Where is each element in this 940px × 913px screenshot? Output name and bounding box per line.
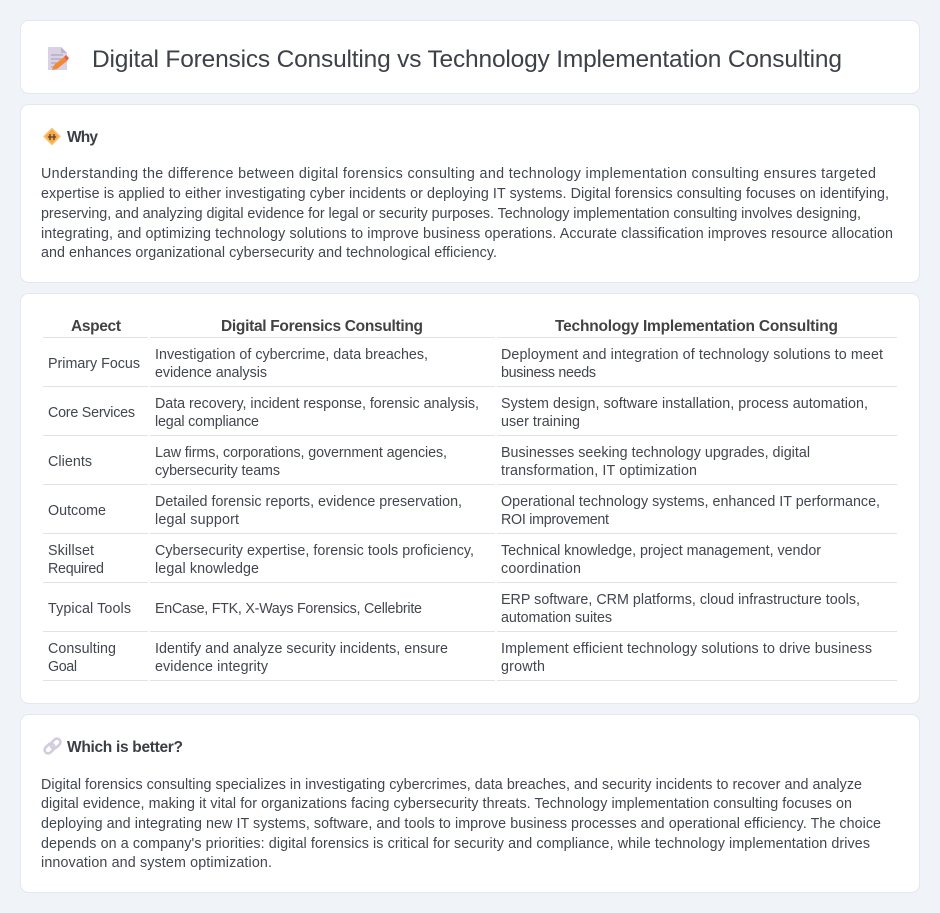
icon: warning diamond (44, 128, 60, 144)
row: outcome: Detailed forensic reports, evidence preservation, (155, 494, 462, 510)
text block: why: preserving, and analyzing digital evidence for legal or security purposes. Technology implementation consulting involves designing, (41, 206, 861, 222)
row: skillset required: Skillset (48, 543, 94, 559)
row: clients: cybersecurity teams (155, 463, 280, 479)
row: typical tools: EnCase, FTK, X-Ways Forensics, Cellebrite (155, 601, 422, 617)
row: outcome: legal support (155, 512, 239, 528)
row: outcome: Operational technology systems, enhanced IT performance, (501, 494, 880, 510)
row: consulting goal: Consulting (48, 641, 116, 657)
row: skillset required: Technical knowledge, project management, vendor (501, 543, 821, 559)
panel: comparison table (20, 294, 920, 704)
text block: why: integrating, and optimizing technology solutions to improve business operations. Accurate classification improves resource allocation (41, 226, 893, 242)
row: primary focus: Primary Focus (48, 356, 140, 372)
row: outcome (48, 494, 880, 528)
title panel (20, 20, 920, 94)
row: outcome: ROI improvement (501, 512, 609, 528)
row: skillset required: coordination (501, 561, 581, 577)
row: primary focus: business needs (501, 365, 596, 381)
text block: which is better: digital evidence, making it vital for organizations facing cybersecurity threats. Technology implementation consulting focuses on (41, 796, 852, 812)
row: primary focus: Investigation of cybercrime, data breaches, (155, 347, 428, 363)
row: core services: Core Services (48, 405, 135, 421)
row: clients: Law firms, corporations, government agencies, (155, 445, 447, 461)
icon: document with pencil (48, 47, 69, 70)
text block: which is better: deploying and integrating new IT systems, software, and tools to improve business processes and operational efficiency. The choice (41, 816, 881, 832)
row: clients (48, 445, 810, 479)
row: core services: user training (501, 414, 580, 430)
row: consulting goal (48, 641, 872, 675)
table header: Aspect (71, 318, 121, 335)
row: core services (48, 396, 868, 430)
table header (71, 318, 838, 335)
row: primary focus: evidence analysis (155, 365, 267, 381)
text block: which is better: innovation and system optimization. (41, 855, 272, 871)
panel: why (20, 104, 920, 282)
row: clients: Clients (48, 454, 92, 470)
icon: chain link (43, 737, 62, 755)
row: consulting goal: Goal (48, 659, 77, 675)
row: typical tools (48, 592, 860, 626)
heading: which is better: Which is better? (67, 739, 183, 756)
heading: why: Why (67, 129, 98, 146)
text block: which is better: depends on a company's priorities: digital forensics is critical for security and compliance, while technology implementation drives (41, 836, 870, 852)
row: skillset required: Cybersecurity expertise, forensic tools proficiency, (155, 543, 474, 559)
row: typical tools: ERP software, CRM platforms, cloud infrastructure tools, (501, 592, 860, 608)
row: skillset required: Required (48, 561, 104, 577)
row: skillset required: legal knowledge (155, 561, 259, 577)
text block: why: Understanding the difference between digital forensics consulting and technology implementation consulting ensures targeted (41, 166, 876, 182)
table header: Technology Implementation Consulting (555, 318, 838, 335)
row: core services: Data recovery, incident response, forensic analysis, (155, 396, 479, 412)
panel: which is better (20, 714, 920, 892)
row: clients: Businesses seeking technology upgrades, digital (501, 445, 810, 461)
text block: why: and enhances organizational cybersecurity and technological efficiency. (41, 245, 497, 261)
row: clients: transformation, IT optimization (501, 463, 697, 479)
row: skillset required (48, 543, 821, 577)
row: typical tools: Typical Tools (48, 601, 131, 617)
row: core services: legal compliance (155, 414, 259, 430)
text block: which is better: Digital forensics consulting specializes in investigating cybercrimes, data breaches, and security incidents to recover and analyze (41, 777, 862, 793)
row: consulting goal: Implement efficient technology solutions to drive business (501, 641, 872, 657)
row: outcome: Outcome (48, 503, 106, 519)
row: consulting goal: evidence integrity (155, 659, 269, 675)
title: Digital Forensics Consulting vs Technology Implementation Consulting (92, 46, 842, 73)
text block: why: expertise is applied to either investigating cyber incidents or deploying IT systems. Digital forensics consulting focuses on identifying, (41, 186, 889, 202)
row: primary focus (48, 347, 883, 381)
row: typical tools: automation suites (501, 610, 612, 626)
text block: which is better (41, 777, 881, 871)
table header: Digital Forensics Consulting (221, 318, 423, 335)
row: consulting goal: growth (501, 659, 545, 675)
text block: why (41, 166, 893, 261)
row: core services: System design, software installation, process automation, (501, 396, 868, 412)
row: consulting goal: Identify and analyze security incidents, ensure (155, 641, 448, 657)
row: primary focus: Deployment and integration of technology solutions to meet (501, 347, 883, 363)
